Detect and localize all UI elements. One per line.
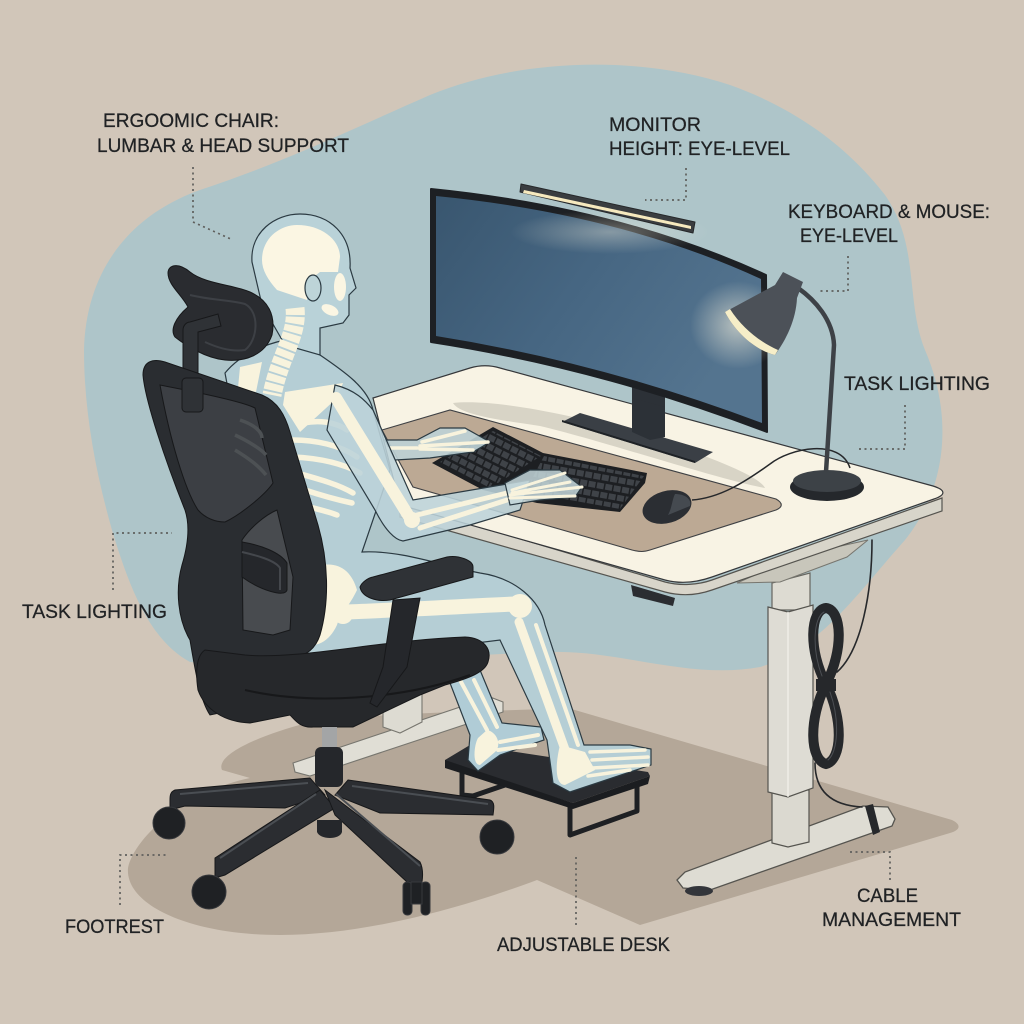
foot strap (865, 804, 880, 835)
label: footrest: FOOTREST (65, 917, 164, 938)
face patches (334, 273, 346, 301)
far leg (445, 670, 544, 771)
label: keyboard and mouse: KEYBOARD & MOUSE: (788, 202, 990, 223)
spine (272, 308, 295, 395)
shin (519, 622, 567, 755)
faint ribs through mesh (235, 420, 266, 475)
shoulder blade (238, 362, 343, 432)
label: monitor: MONITOR (609, 115, 701, 136)
label: task lighting right: TASK LIGHTING (844, 374, 990, 395)
blue background blob (84, 65, 942, 670)
label: adjustable desk: ADJUSTABLE DESK (497, 935, 670, 956)
label: task lighting left: TASK LIGHTING (22, 602, 167, 623)
ribs (293, 422, 360, 515)
controller (631, 585, 675, 606)
forearm bones (417, 493, 507, 528)
headrest clamp (182, 378, 203, 412)
upper post (772, 573, 810, 610)
mouse (639, 485, 695, 529)
torso and near leg (225, 340, 651, 792)
thigh (345, 604, 515, 612)
footrest (445, 745, 650, 835)
near arm (327, 385, 530, 541)
monitor light bar (520, 184, 695, 233)
sleeve (768, 605, 813, 797)
desk mat (382, 410, 781, 552)
label: height eye-level: HEIGHT: EYE-LEVEL (609, 139, 790, 160)
curved monitor (431, 189, 786, 432)
skull (262, 225, 340, 300)
chair base legs (170, 778, 494, 882)
desk lamp (725, 272, 864, 501)
ear (305, 275, 321, 301)
far forearm and hand (385, 428, 490, 460)
armrest support (370, 598, 420, 707)
desk foot (677, 806, 895, 890)
label: cable: CABLE (857, 886, 918, 907)
keyboard (432, 427, 650, 512)
head (252, 214, 356, 355)
floor shadow (128, 708, 959, 935)
label: ergonomic chair: ERGOOMIC CHAIR: (103, 111, 279, 132)
hub (315, 747, 343, 787)
foot bones (557, 745, 595, 785)
gas lift (322, 727, 337, 752)
lumbar support (242, 542, 287, 593)
upper mesh panel (160, 385, 273, 522)
knee (508, 594, 532, 618)
desk top (373, 366, 943, 582)
adjustable desk (373, 366, 943, 896)
pelvis (312, 564, 357, 645)
leg highlights (180, 783, 488, 866)
headrest bracket (183, 314, 221, 382)
headrest (168, 266, 273, 360)
desk edge (400, 498, 942, 595)
casters (153, 807, 514, 915)
humerus (336, 398, 408, 515)
seated figure (225, 214, 651, 792)
seat (197, 637, 489, 727)
lower post (772, 790, 809, 847)
ergonomic chair (143, 266, 514, 915)
underside (737, 540, 868, 583)
near hand (505, 470, 582, 505)
label: eye-level: EYE-LEVEL (800, 226, 898, 247)
label: management: MANAGEMENT (822, 910, 961, 931)
chair back frame (143, 361, 330, 715)
label: lumbar and head support: LUMBAR & HEAD SUPPORT (97, 136, 349, 157)
lower mesh panel (242, 510, 293, 635)
leader lines (113, 167, 905, 925)
armrest pad (360, 557, 473, 600)
monitor stand (562, 385, 713, 463)
monitor shadow on desk (453, 402, 765, 488)
desk: far leg and foot (293, 685, 503, 776)
cable coil (813, 540, 872, 807)
cable (692, 449, 850, 500)
